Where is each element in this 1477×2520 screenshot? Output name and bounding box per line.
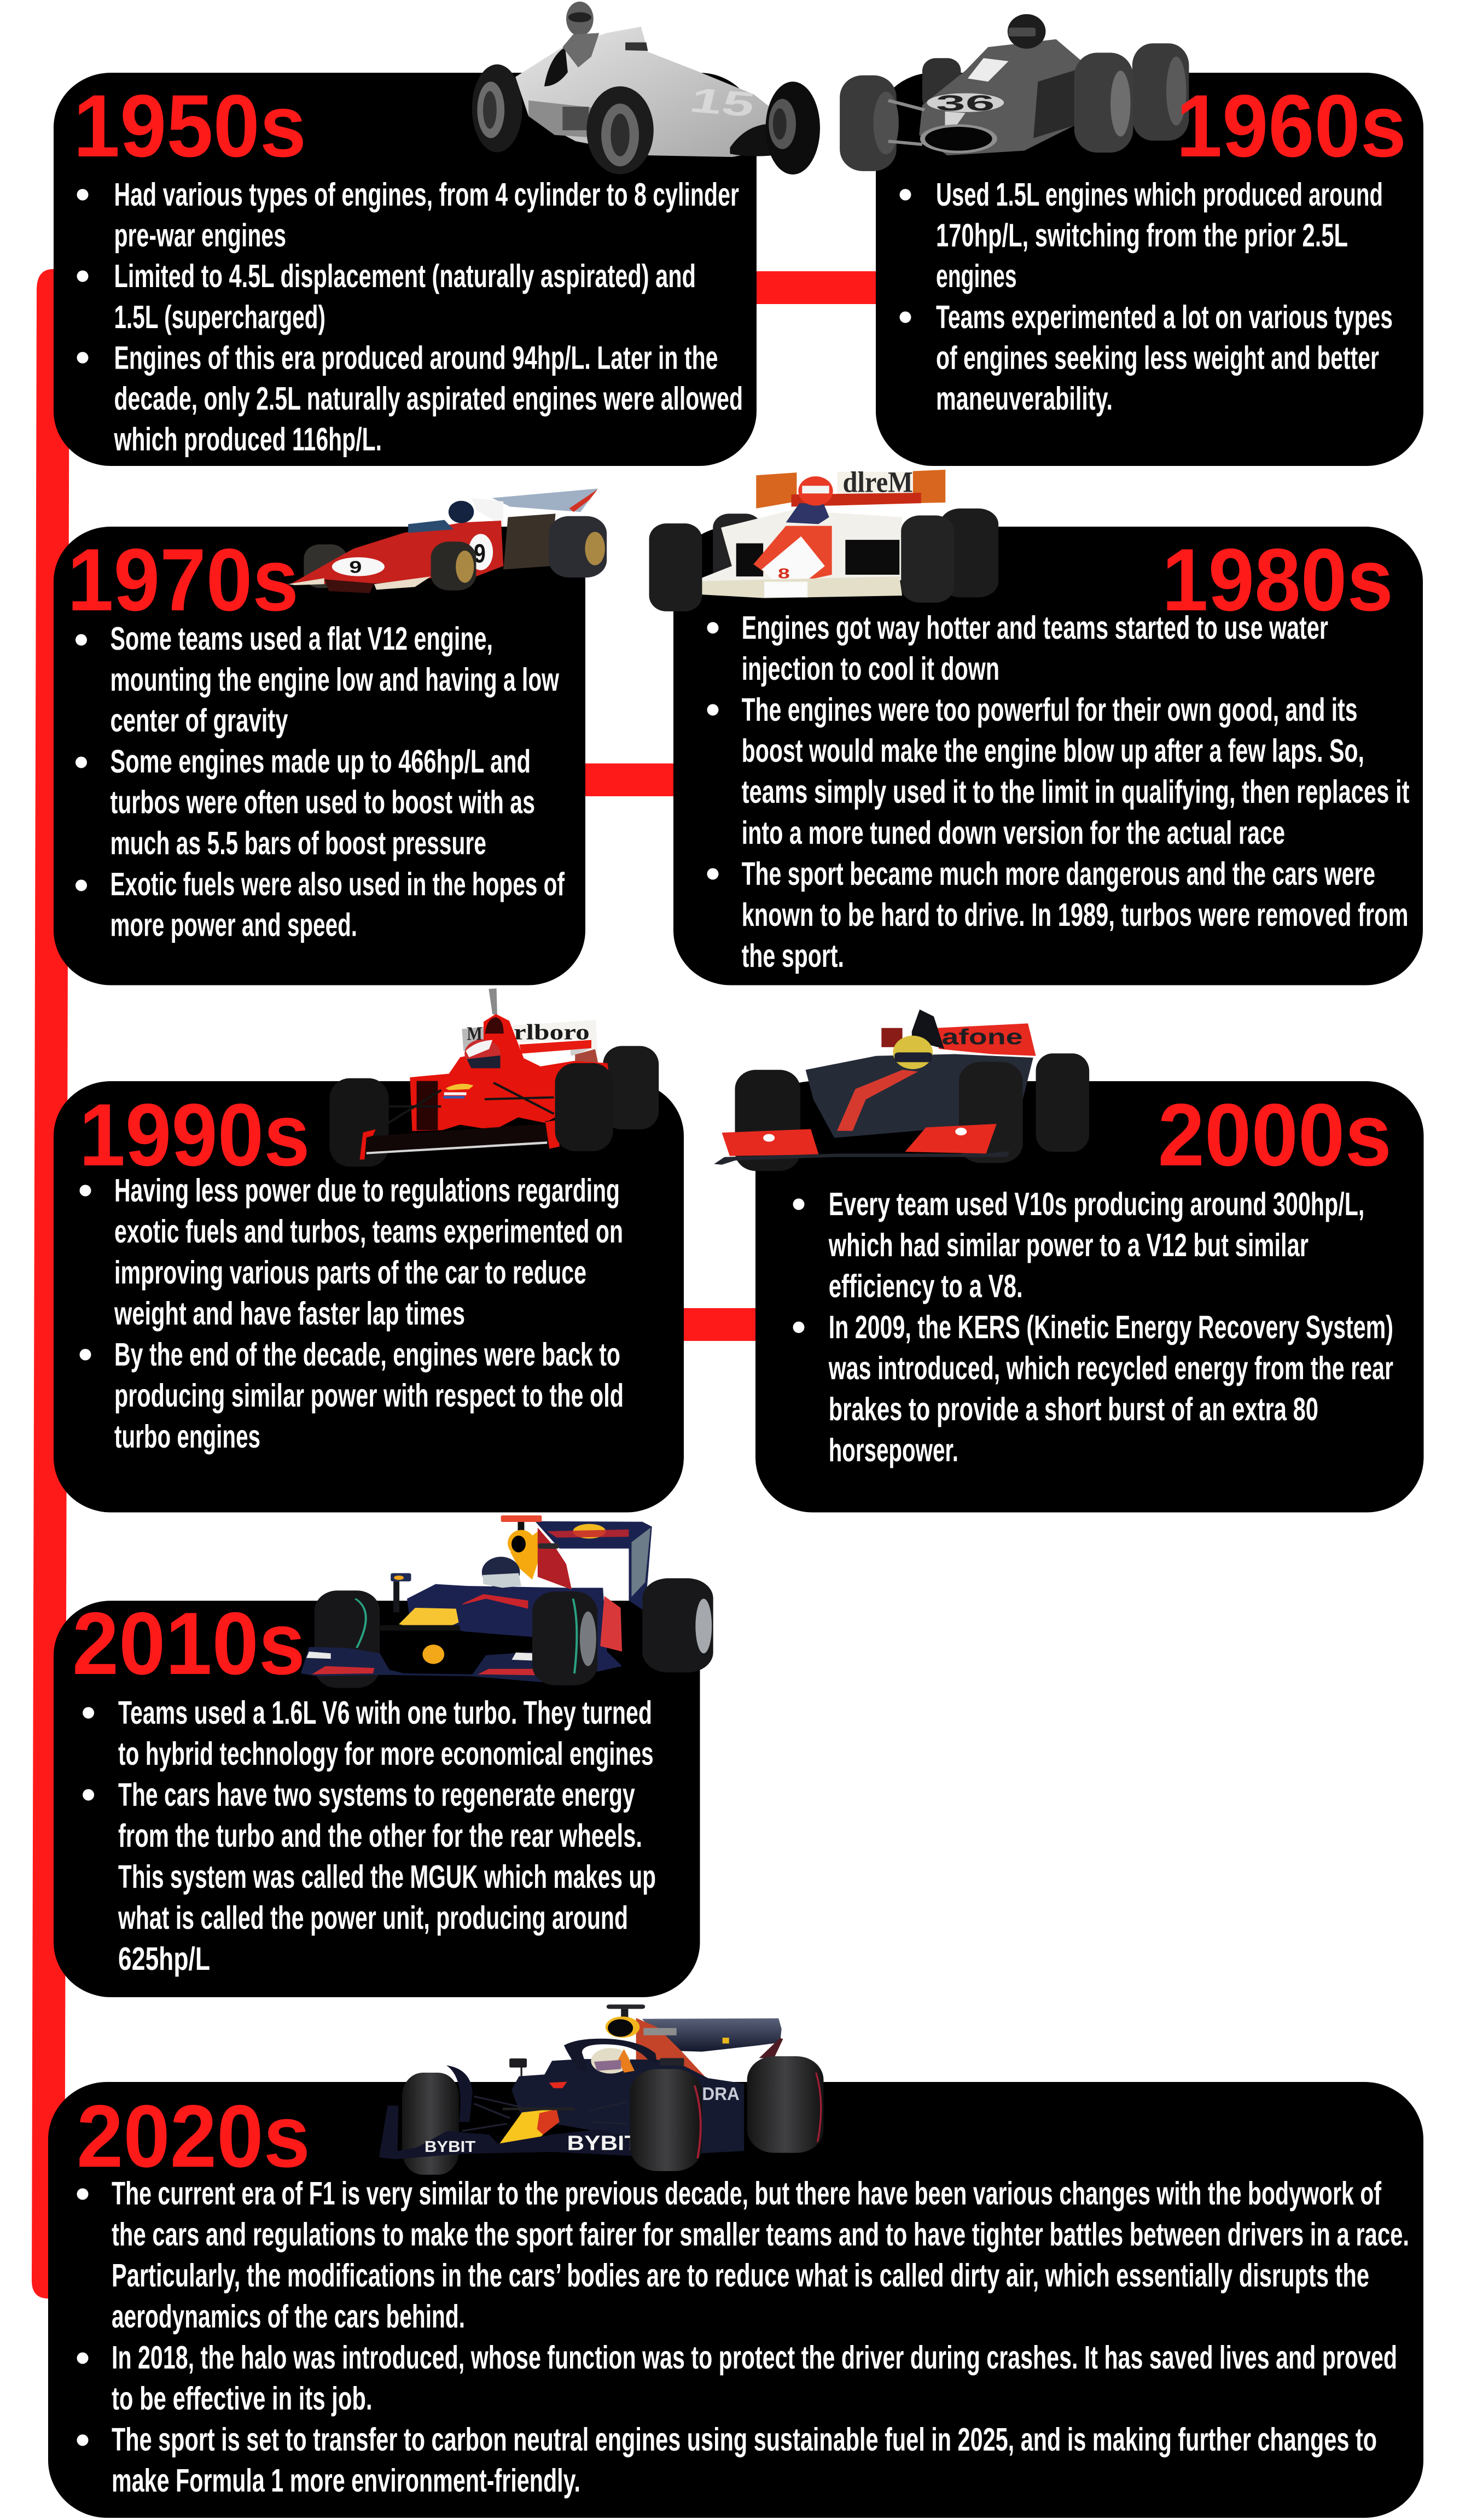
icon: 2020s navy race car: BYBIT (567, 2132, 639, 2155)
heading: 1990s: 1990s (79, 1086, 310, 1185)
icon: 1980s white and red race car (649, 466, 998, 611)
panel: 1950s (54, 2, 820, 466)
bullets: 2010s: what is called the power unit, producing around (118, 1900, 628, 1936)
icon: 1980s white and red race car: 8 (778, 566, 790, 581)
bullets: 1990s: exotic fuels and turbos, teams experimented on (114, 1214, 623, 1250)
timeline vertical line (32, 269, 69, 2299)
panel background 1950s (54, 73, 757, 466)
bullets: 2020s (77, 2175, 1409, 2499)
bullets: 1990s: By the end of the decade, engines were back to (114, 1337, 620, 1373)
bullets: 1950s: which produced 116hp/L. (114, 422, 382, 458)
heading: 2020s: 2020s (77, 2087, 310, 2186)
bullets: 2000s: efficiency to a V8. (829, 1268, 1023, 1304)
bullets: 2000s: horsepower. (829, 1432, 958, 1468)
panel: 2020s (48, 2004, 1423, 2518)
bullets: 1990s (80, 1172, 624, 1455)
panel background 1980s (673, 527, 1423, 985)
heading: 2000s: 2000s (1158, 1086, 1392, 1185)
bullets: 2010s: from the turbo and the other for the rear wheels. (118, 1818, 642, 1854)
bullets: 2020s: aerodynamics of the cars behind. (112, 2299, 465, 2335)
panel background 1970s (54, 527, 585, 985)
bullets: 1950s (77, 177, 743, 458)
panel: 1990s (54, 988, 684, 1513)
bullets: 1970s: turbos were often used to boost with as (111, 784, 535, 820)
bullets: 1950s: Had various types of engines, from 4 cylinder to 8 cylinder (114, 177, 739, 213)
bullets: 1990s: improving various parts of the car to reduce (114, 1255, 586, 1291)
connector 1990s to 2000s (681, 1308, 758, 1341)
bullets: 2010s: Teams used a 1.6L V6 with one turbo. They turned (118, 1695, 652, 1731)
bullets: 1960s: engines (936, 258, 1017, 294)
panel background 2010s (54, 1601, 700, 1997)
icon: 1990s red race car: rlboro (514, 1020, 590, 1045)
bullets: 1970s (75, 621, 565, 943)
bullets: 1950s: 1.5L (supercharged) (114, 299, 325, 335)
bullets: 1970s: Some engines made up to 466hp/L and (111, 743, 531, 779)
bullets: 1950s: pre-war engines (114, 218, 286, 254)
connector 1950s to 1960s (755, 271, 878, 304)
panel: 1980s (649, 466, 1423, 985)
icon: 2010s blue and yellow race car: TOTAL (539, 1651, 565, 1666)
bullets: 1960s (899, 177, 1393, 417)
panel background 1960s (876, 73, 1423, 466)
icon: 1990s red race car: M (467, 1023, 482, 1045)
heading: 1970s: 1970s (67, 530, 299, 629)
bullets: 1950s: Engines of this era produced around 94hp/L. Later in the (114, 340, 718, 376)
icon: 1990s red race car (329, 988, 659, 1166)
icon: 2020s navy race car: DRA (702, 2084, 740, 2104)
icon: 1980s white and red race car: dlreM (842, 466, 913, 499)
bullets: 1970s: much as 5.5 bars of boost pressure (111, 825, 486, 861)
panel: 2010s (54, 1515, 713, 1997)
bullets: 1950s: Limited to 4.5L displacement (naturally aspirated) and (114, 258, 696, 294)
bullets: 1970s: Some teams used a flat V12 engine, (111, 621, 493, 657)
panel background 2020s (48, 2082, 1423, 2518)
icon: 1960s grayscale race car: 36 (936, 91, 995, 115)
bullets: 1980s (707, 610, 1409, 974)
icon: 1970s red race car: 9 (349, 557, 362, 577)
heading: 1980s: 1980s (1162, 530, 1393, 629)
heading: 2010s: 2010s (72, 1594, 305, 1693)
bullets: 1970s: more power and speed. (111, 907, 357, 943)
icon: 2020s navy race car: BYBIT (425, 2138, 476, 2156)
connector 1970s to 1980s (583, 763, 676, 796)
heading: 1950s: 1950s (73, 77, 306, 176)
bullets: 2010s: The cars have two systems to regenerate energy (118, 1777, 635, 1813)
icon: 2020s navy race car (380, 2004, 823, 2175)
bullets: 1950s: decade, only 2.5L naturally aspirated engines were allowed (114, 381, 743, 417)
icon: 1950s grayscale race car (472, 2, 820, 174)
panel: 1970s (54, 488, 607, 985)
bullets: 2020s: to be effective in its job. (112, 2381, 373, 2417)
icon: 1970s red race car: 9 (474, 539, 486, 568)
bullets: 1980s: injection to cool it down (742, 651, 999, 687)
panel background 2000s (755, 1081, 1423, 1513)
bullets: 2010s: 625hp/L (118, 1941, 210, 1977)
icon: 2000s silver and red race car (714, 1010, 1089, 1171)
panel: 2000s (714, 1010, 1423, 1513)
bullets: 2010s: This system was called the MGUK which makes up (118, 1859, 656, 1895)
bullets: 1970s: center of gravity (111, 703, 288, 739)
panel: 1960s (840, 14, 1423, 466)
panel background 1990s (54, 1081, 684, 1513)
bullets: 1990s: turbo engines (114, 1419, 260, 1455)
icon: 1950s grayscale race car: 15 (687, 81, 759, 124)
bullets: 1990s: producing similar power with respect to the old (114, 1378, 624, 1414)
bullets: 1990s: weight and have faster lap times (114, 1296, 465, 1332)
icon: 1970s red race car (288, 488, 607, 593)
bullets: 1970s: Exotic fuels were also used in the hopes of (111, 866, 565, 902)
bullets: 2000s (793, 1186, 1393, 1468)
icon: 1960s grayscale race car (840, 14, 1189, 171)
bullets: 1980s: the sport. (742, 938, 844, 974)
bullets: 2010s (83, 1695, 656, 1977)
bullets: 2020s: make Formula 1 more environment-friendly. (112, 2463, 580, 2499)
bullets: 2010s: to hybrid technology for more economical engines (118, 1736, 654, 1772)
bullets: 1990s: Having less power due to regulations regarding (114, 1172, 620, 1209)
bullets: 1960s: maneuverability. (936, 381, 1113, 417)
bullets: 1970s: mounting the engine low and having a low (111, 662, 559, 698)
icon: 2010s blue and yellow race car (301, 1515, 713, 1688)
heading: 1960s: 1960s (1176, 77, 1406, 176)
icon: 2000s silver and red race car: afone (941, 1025, 1023, 1049)
